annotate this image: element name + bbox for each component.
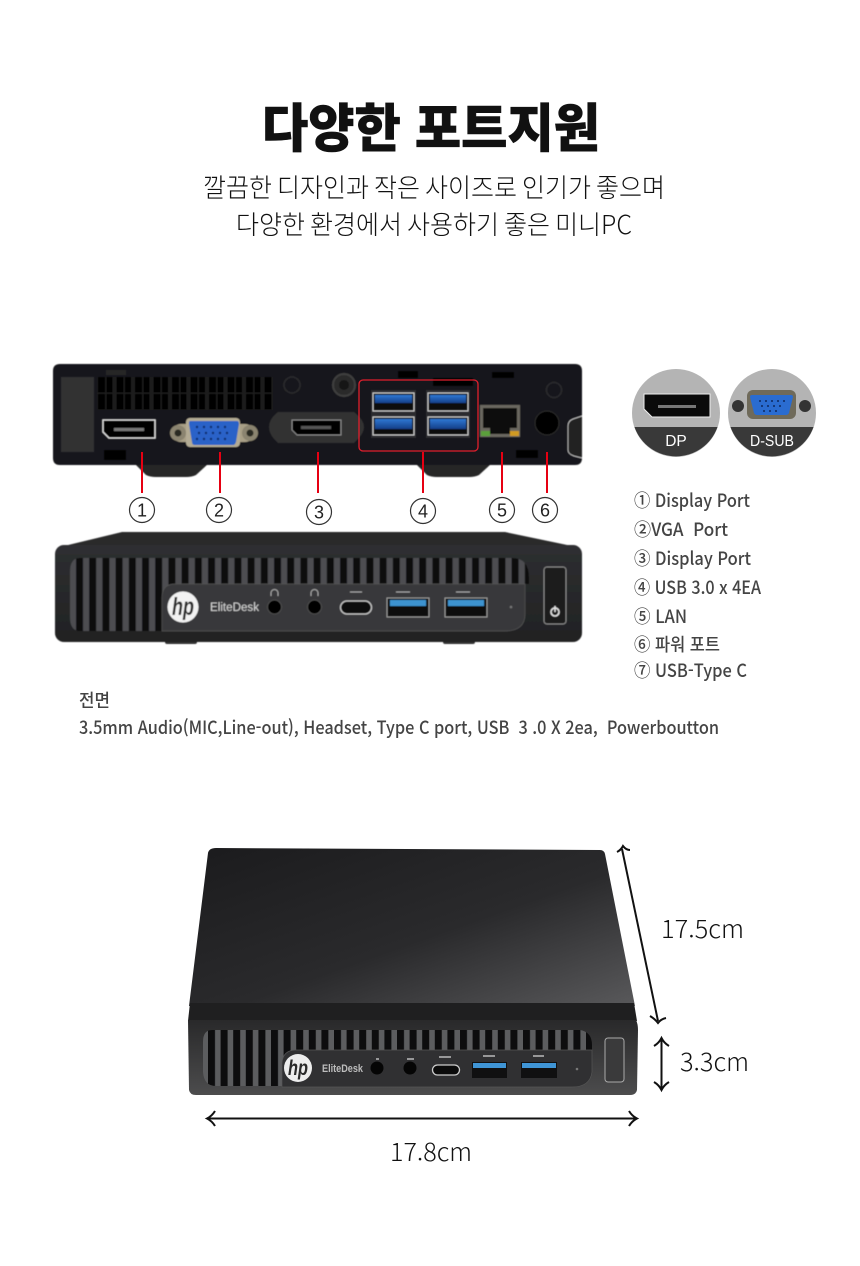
depth arrow [617, 846, 666, 1023]
port legend: ① Display Port [634, 487, 750, 513]
port thumbnail: DP: DP [665, 433, 687, 450]
subtitle [203, 168, 665, 242]
port legend: ②VGA Port [634, 516, 728, 542]
front chassis [55, 545, 582, 642]
USB-C port [340, 601, 372, 614]
port 2 VGA [170, 418, 258, 447]
port 4 USB ports [371, 390, 470, 438]
front top surface [64, 532, 572, 546]
LED [576, 1068, 578, 1070]
port 5 LAN [480, 405, 520, 437]
number markers: 6 [540, 500, 550, 520]
HP logo [168, 592, 198, 622]
top surface [189, 848, 635, 1006]
title: 다양한 포트지원 [262, 87, 600, 162]
width arrow [207, 1111, 637, 1126]
number markers: 4 [418, 502, 428, 522]
rear view of mini PC [53, 364, 582, 477]
power button [605, 1038, 624, 1082]
USB highlight box [359, 380, 478, 451]
front lip [188, 1003, 637, 1021]
port 6 power [535, 411, 559, 435]
port legend: ⑦ USB-Type C [634, 657, 747, 683]
front port description [79, 687, 719, 740]
front view of mini PC [55, 532, 582, 644]
port icons [376, 1056, 544, 1059]
number markers: 5 [497, 500, 507, 520]
front USB ports [387, 598, 487, 617]
front vent grille [70, 558, 529, 631]
number markers [130, 498, 558, 524]
audio jacks [370, 1062, 416, 1074]
number markers: 2 [214, 500, 224, 520]
rear side panel [61, 377, 94, 452]
subtitle: 깔끔한 디자인과 작은 사이즈로 인기가 좋으며 [203, 168, 665, 205]
rear vents [97, 377, 273, 410]
front inner panel [162, 584, 525, 631]
port thumbnail: D-SUB [728, 369, 816, 457]
rear chassis [53, 364, 582, 465]
HP logo [284, 1054, 312, 1082]
depth label: 17.5cm [661, 910, 744, 946]
port thumbnail: DP [632, 369, 720, 457]
front feet [165, 640, 475, 644]
rear slots and holes [104, 370, 562, 460]
port thumbnail: D-SUB: D-SUB [750, 433, 794, 450]
number markers: 3 [314, 502, 324, 522]
LED [510, 606, 512, 608]
port legend: ⑤ LAN [634, 603, 687, 629]
USB-C port [432, 1065, 460, 1075]
port legend: ③ Display Port [634, 545, 751, 571]
port 3 display port [269, 412, 364, 443]
vent grille [203, 1030, 592, 1086]
port legend: ⑥ 파워 포트 [634, 631, 720, 657]
power button [544, 567, 566, 624]
red leader lines [142, 452, 547, 493]
subtitle: 다양한 환경에서 사용하기 좋은 미니PC [236, 205, 632, 242]
HP logo: hp [172, 593, 194, 621]
USB ports [472, 1062, 557, 1078]
rear feet [135, 464, 491, 477]
front port description: 전면 [79, 687, 110, 713]
3D view of mini PC [188, 848, 638, 1095]
front port description: 3.5mm Audio(MIC,Line-out), Headset, Type C port, USB 3 .0 X 2ea, Powerboutton [79, 714, 719, 740]
port legend [634, 487, 762, 683]
EliteDesk label: EliteDesk [210, 602, 259, 614]
height arrow [654, 1038, 669, 1090]
inner panel [282, 1050, 592, 1087]
port 1 display port [103, 420, 155, 438]
port icons [271, 590, 470, 596]
port legend: ④ USB 3.0 x 4EA [634, 574, 762, 600]
number markers: 1 [137, 500, 147, 520]
EliteDesk label: EliteDesk [322, 1063, 364, 1075]
HP logo: hp [288, 1057, 308, 1080]
rear right notch [568, 416, 582, 458]
height label: 3.3cm [680, 1043, 749, 1079]
audio jacks [268, 600, 322, 614]
screw [333, 374, 355, 396]
width label: 17.8cm [390, 1133, 472, 1169]
front body [188, 1020, 638, 1095]
